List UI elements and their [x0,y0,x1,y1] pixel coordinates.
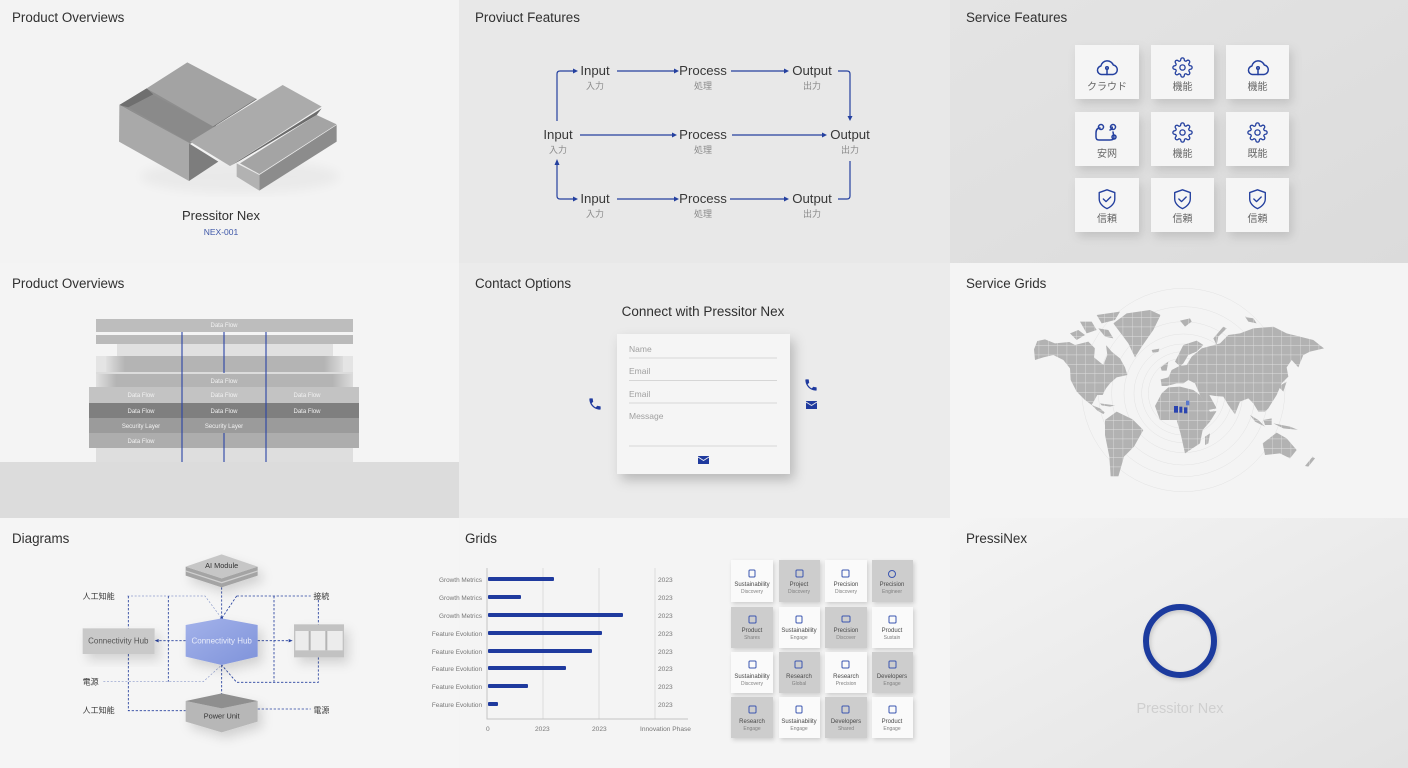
axis labels [486,726,691,733]
dotted connectors [103,587,318,711]
flow diagram arrows [554,68,852,202]
card: network [1075,112,1139,166]
grid card 13: Engage [743,726,761,732]
layer labels: Data Flow [210,323,238,329]
grid card 4: Precision [880,582,904,588]
flow labels: top row: Process [679,63,727,78]
flow labels: middle row [543,127,870,155]
grid card 5: Shares [744,635,760,641]
category labels [432,577,482,709]
category labels: Feature Evolution [432,702,482,709]
grid card 10 [779,652,820,693]
year labels: 2023 [658,595,673,602]
flow labels: middle row: 出力 [841,144,859,155]
card: function 1 [1151,45,1214,99]
layer labels: Data Flow [293,409,321,415]
flow labels: middle row: Output [830,127,870,142]
flow labels: top row: 入力 [586,80,604,91]
category labels: Feature Evolution [432,631,482,638]
diagram labels: 電源 [313,706,329,715]
data flow connectors [182,332,266,462]
flow labels: middle row: 入力 [549,144,567,155]
grid card 13: Research [739,719,765,725]
grid card 15: Shared [838,726,854,732]
grid card 15 [825,697,867,738]
contact form card: Message [629,411,664,421]
layer stack [89,319,359,462]
card: function 3 [1226,112,1289,166]
card: trust 2 [1151,178,1214,232]
card: function cloud [1226,45,1289,99]
flow labels: bottom row [580,191,832,219]
landmasses [1034,310,1324,477]
panel: service features [950,0,1408,263]
flow labels: middle row: 処理 [694,144,712,155]
year labels: 2023 [658,631,673,638]
card: trust 3: 信頼 [1248,212,1268,225]
diagram labels: 電源 [83,678,99,687]
blue highlighted region [1174,401,1189,413]
layer labels: Security Layer [205,424,243,430]
bar chart [432,568,691,733]
layer labels: Data Flow [127,393,155,399]
grid card 1 [731,560,773,602]
grid card 7: Discover [836,635,856,641]
node: AI module [186,554,258,587]
grid card 8: Product [882,628,903,634]
panel: diagrams [0,518,459,768]
icon: send mail [698,456,709,464]
grid card 11 [825,652,867,693]
grid card 5: Product [742,628,763,634]
flow labels: bottom row: 出力 [803,208,821,219]
year labels: 2023 [658,666,673,673]
flow labels: top row: Input [580,63,610,78]
year labels: 2023 [658,702,673,709]
grid card 3: Discovery [835,589,857,595]
grid card 2: Project [790,582,809,588]
grid card 10: Research [786,674,812,680]
heading: product features: Proviuct Features [475,10,580,25]
category labels: Growth Metrics [439,595,482,602]
icon: phone right [805,379,817,391]
layer labels: Data Flow [210,409,238,415]
illustration: isometric product box [119,62,340,193]
card: function 1: 機能 [1172,80,1192,93]
flow labels: middle row: Input [543,127,573,142]
brand wordmark: Pressitor Nex [1136,701,1224,717]
flow labels: bottom row: Input [580,191,610,206]
icon: phone left [589,398,601,410]
heading: grids: Grids [465,531,497,546]
grid card 1: Discovery [741,589,763,595]
heading: contact options: Contact Options [475,276,571,291]
grid card 11: Research [833,674,859,680]
category labels: Growth Metrics [439,577,482,584]
card: cloud [1075,45,1139,99]
floor band [0,462,459,518]
flow labels: top row: 出力 [803,80,821,91]
grid card 3 [825,560,867,602]
radial rings [1082,288,1285,492]
diagram labels: 人工知能 [83,591,115,601]
heading: service features: Service Features [966,10,1068,25]
flow labels: bottom row: 入力 [586,208,604,219]
grid card 2 [779,560,820,602]
diagram labels: 接続 [313,591,329,601]
grid card 4 [872,560,913,602]
axis labels: Innovation Phase [640,726,691,733]
grid card 6: Sustainability [781,628,817,634]
diagram labels [83,591,329,715]
grid card 12: Developers [877,674,907,680]
product name: Pressitor Nex [182,208,261,223]
flow labels: bottom row: Output [792,191,832,206]
card: trust 1: 信頼 [1097,212,1117,225]
flow labels: top row: Output [792,63,832,78]
panel: contact options [459,263,950,518]
grid card 1: Sustainability [734,582,770,588]
layer labels [122,323,321,445]
axis labels: 0 [486,726,490,733]
diagram labels: 人工知能 [83,705,115,715]
card: function 2 [1151,112,1214,166]
heading: service grids: Service Grids [966,276,1047,291]
card: cloud: クラウド [1087,81,1127,93]
layer labels: Data Flow [210,379,238,385]
contact form card: Name [629,344,652,354]
node: connectivity hub center [186,618,258,665]
node: connectivity hub center: Connectivity Hub [191,637,252,646]
grid card 7 [825,607,867,648]
layer labels: Data Flow [293,393,321,399]
heading: PressiNex: PressiNex [966,531,1027,546]
flow labels: bottom row: Process [679,191,727,206]
node: connectivity hub left: Connectivity Hub [88,637,149,646]
grid card 9: Sustainability [734,674,770,680]
grid card 9: Discovery [741,681,763,687]
grid card 13 [731,697,773,738]
node: module right [294,624,344,657]
year labels: 2023 [658,577,673,584]
flow labels: middle row: Process [679,127,727,142]
grid card 5 [731,607,773,648]
world map [1034,288,1324,492]
card: trust 2: 信頼 [1172,212,1192,225]
panel: layered architecture [0,263,459,518]
category labels: Feature Evolution [432,666,482,673]
grid card 14: Sustainability [781,719,817,725]
flow labels: bottom row: 処理 [694,208,712,219]
icon: blue ring logo [1146,607,1214,675]
layer labels: Data Flow [127,409,155,415]
year labels: 2023 [658,649,673,656]
card grid [731,560,913,738]
category labels: Feature Evolution [432,684,482,691]
panel: PressiNex brand [950,518,1408,768]
layer labels: Data Flow [127,439,155,445]
grid card 2: Discovery [788,589,810,595]
grid card 9 [731,652,773,693]
panel: grids [432,518,950,768]
panel: service grids map [950,263,1408,518]
grid card 12 [872,652,913,693]
grid card 12: Engage [883,681,901,687]
grid card 15: Developers [831,719,861,725]
category labels: Feature Evolution [432,649,482,656]
grid card 16: Product [882,719,903,725]
year labels: 2023 [658,684,673,691]
grid card 11: Precision [836,681,856,687]
node: power unit: Power Unit [204,712,240,721]
grid card 6 [779,607,820,648]
contact heading: Connect with Pressitor Nex [622,304,785,319]
grid card 6: Engage [790,635,808,641]
grid card 10: Global [792,681,806,687]
card: function cloud: 機能 [1248,80,1268,93]
node: connectivity hub left [83,628,155,654]
contact form card [617,334,790,474]
node: power unit [186,693,258,732]
contact form card: Email [629,389,650,399]
connectivity diagram [83,554,344,732]
grid card 16: Engage [883,726,901,732]
heading: product overviews: Product Overviews [12,276,125,291]
panel: product overview box [0,0,459,263]
flow labels: top row [580,63,832,91]
contact form card: Email [629,366,650,376]
node: AI module: AI Module [205,561,238,570]
flow labels: top row: 処理 [694,80,712,91]
layer labels: Data Flow [210,393,238,399]
grid card 3: Precision [834,582,858,588]
heading: product overviews: Product Overviews [12,10,125,25]
grid card 8: Sustain [884,635,901,641]
card: function 3: 既能 [1248,147,1268,160]
bars [488,577,623,706]
icon: mail right [806,401,817,409]
year labels: 2023 [658,613,673,620]
grid card 14: Engage [790,726,808,732]
grid card 16 [872,697,913,738]
axis labels: 2023 [592,726,607,733]
card: trust 3 [1226,178,1289,232]
grid card 7: Precision [834,628,858,634]
card: trust 1 [1075,178,1139,232]
product code: NEX-001 [204,227,239,237]
card: network: 安网 [1097,148,1117,160]
category labels: Growth Metrics [439,613,482,620]
layer labels: Security Layer [122,424,160,430]
grid card 4: Engineer [882,589,902,595]
card: function 2: 機能 [1172,147,1192,160]
axis labels: 2023 [535,726,550,733]
grid card 8 [872,607,913,648]
heading: diagrams: Diagrams [12,531,70,546]
panel: product features flow [459,0,950,263]
grid card 14 [779,697,820,738]
year labels [658,577,673,709]
